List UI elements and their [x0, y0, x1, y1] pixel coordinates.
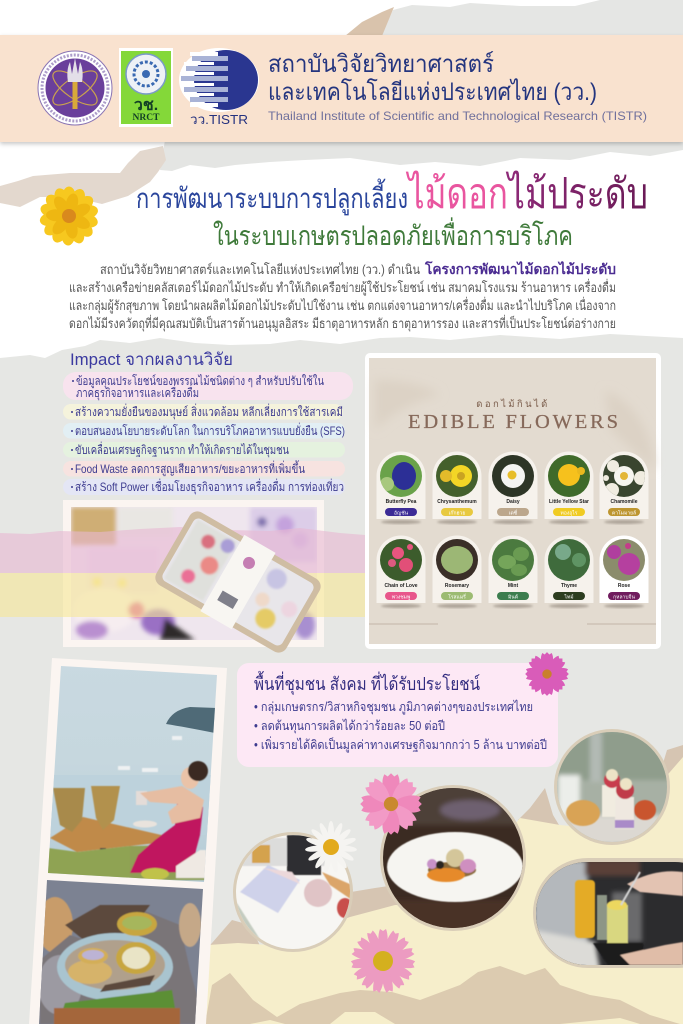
logo: TISTR emblem round purple — [38, 51, 112, 125]
box label — [200, 535, 276, 629]
card: chrysanthemum: Chrysanthemum — [437, 499, 477, 505]
card: mint: มินต์ — [508, 593, 518, 600]
impact item 5: Food Waste ลดการสูญเสียอาหาร/ขยะอาหารที่เพิ่มขึ้น — [75, 460, 305, 477]
card: little yellow star: Little Yellow Star — [549, 499, 589, 505]
community item 2: • ลดต้นทุนการผลิตได้กว่าร้อยละ 50 ต่อปี — [254, 719, 445, 734]
card: chain of love — [376, 536, 426, 608]
impact item 4: ขับเคลื่อนเศรษฐกิจฐานราก ทำให้เกิดรายได้ในชุมชน — [75, 441, 289, 458]
photo circle: tea product table — [233, 832, 355, 955]
panel: impact — [63, 350, 353, 495]
card: chain of love: พวงชมพู — [392, 594, 410, 600]
community item 1: • กลุ่มเกษตรกร/วิสาหกิจชุมชน ภูมิภาคต่างๆของประเทศไทย — [254, 700, 533, 715]
background: pink and yellow bands — [0, 527, 365, 617]
main title: ไม้ดอก — [406, 170, 508, 217]
header title text — [268, 50, 647, 123]
icon: pink cosmos — [360, 773, 422, 835]
intro paragraph — [69, 260, 616, 332]
card: chamomile: Chamomile — [611, 499, 638, 505]
card: chamomile: คาโมมายล์ — [612, 509, 636, 516]
intro paragraph: โครงการพัฒนาไม้ดอกไม้ประดับ — [424, 260, 616, 277]
panel: edible flowers — [365, 353, 661, 649]
icon: yellow flower — [39, 186, 99, 246]
card: daisy: Daisy — [506, 499, 520, 505]
card: butterfly pea: Butterfly Pea — [386, 499, 417, 505]
impact item 1: ข้อมูลคุณประโยชน์ของพรรณไม้ชนิดต่าง ๆ สำหรับปรับใช้ใน — [76, 374, 324, 389]
icon: magenta cosmos — [525, 652, 569, 696]
background: grey torn top right — [380, 0, 683, 40]
main title: ไม้ประดับ — [506, 170, 648, 217]
impact item 1: ภาคธุรกิจอาหารและเครื่องดื่ม — [76, 384, 199, 401]
card: thyme: ไทม์ — [563, 593, 574, 600]
background: beige hills bottom — [205, 966, 680, 1024]
header band — [0, 35, 683, 142]
logo: NRCT green square — [119, 48, 173, 127]
background: beige torn strip title — [0, 146, 166, 207]
main title: ในระบบเกษตรปลอดภัยเพื่อการบริโภค — [213, 217, 573, 251]
card: chain of love: Chain of Love — [384, 583, 418, 589]
photo: plated dessert — [36, 875, 208, 1024]
heading: edible flowers thai: ดอกไม้กินได้ — [476, 398, 550, 410]
card: daisy — [488, 452, 538, 524]
heading: edible flowers: EDIBLE FLOWERS — [408, 411, 618, 433]
impact item 3 — [63, 422, 345, 438]
community item 3: • เพิ่มรายได้คิดเป็นมูลค่าทางเศรษฐกิจมากกว่า 5 ล้าน บาทต่อปี — [254, 736, 547, 753]
logo: NRCT green square: วช. — [134, 97, 158, 114]
logo: NRCT green square: NRCT — [133, 113, 160, 123]
card: mint — [488, 536, 538, 608]
header title text: และเทคโนโลยีแห่งประเทศไทย (วว.) — [268, 78, 597, 106]
card: thyme: Thyme — [561, 583, 577, 589]
background: grey lower page — [0, 334, 683, 1024]
card: rosemary — [432, 536, 482, 608]
card: little yellow star: ทองอุไร — [561, 509, 578, 516]
icon: pink daisy — [351, 929, 415, 993]
panel: community benefits — [237, 663, 558, 767]
photo capsule: bartender drink — [533, 858, 683, 970]
photo: edible flowers box background — [63, 500, 324, 647]
icon: white daisy — [305, 821, 357, 873]
impact item 2: สร้างความยั่งยืนของมนุษย์ สิ่งแวดล้อม หลีกเลี่ยงการใช้สารเคมี — [75, 403, 343, 420]
impact item 6 — [63, 478, 345, 495]
card: chamomile — [600, 452, 648, 524]
logo: TISTR round blue: วว.TISTR — [190, 112, 248, 127]
header title text: สถาบันวิจัยวิทยาศาสตร์ — [268, 50, 494, 78]
impact item 1 — [63, 372, 353, 401]
photo circle: parfait desserts — [554, 729, 670, 845]
card: butterfly pea — [376, 452, 426, 524]
main title — [136, 170, 648, 251]
intro paragraph: สถาบันวิจัยวิทยาศาสตร์และเทคโนโลยีแห่งประเทศไทย (วว.) ดำเนิน — [100, 262, 420, 277]
photo strip: polaroid frame — [29, 658, 227, 1024]
card: rosemary: โรสแมรี่ — [448, 593, 466, 600]
photo: packaged flowers box — [151, 506, 325, 658]
background: beige torn patches bottom — [205, 745, 683, 950]
impact item 3: ตอบสนองนโยบายระดับโลก ในการบริโภคอาหารแบบยั่งยืน (SFS) — [75, 422, 345, 438]
card: chrysanthemum: เก๊กฮวย — [449, 509, 465, 516]
photo: woman at sea terrace — [48, 666, 217, 882]
card: rose: Rose — [618, 583, 630, 589]
heading: impact: Impact จากผลงานวิจัย — [70, 350, 233, 369]
main title: การพัฒนาระบบการปลูกเลี้ยง — [136, 178, 408, 216]
impact item 2 — [63, 403, 343, 420]
photo circle: plated dish — [380, 785, 526, 935]
logo: TISTR round blue — [179, 48, 259, 127]
background: grey behind title — [160, 140, 683, 171]
card: little yellow star — [544, 452, 594, 524]
heading: community benefits: พื้นที่ชุมชน สังคม ที่ได้รับประโยชน์ — [254, 671, 480, 695]
card: mint: Mint — [508, 583, 518, 589]
impact item 6: สร้าง Soft Power เชื่อมโยงธุรกิจอาหาร เครื่องดื่ม การท่องเที่ยว — [75, 478, 344, 495]
background: cream ground — [205, 757, 683, 1024]
card: butterfly pea: อัญชัน — [394, 510, 409, 516]
card: rosemary: Rosemary — [445, 583, 469, 589]
card: rose — [600, 536, 648, 608]
card: thyme — [544, 536, 594, 608]
background: beige torn strip top — [345, 7, 394, 36]
card: rose: กุหลาบจีน — [613, 593, 635, 600]
card: chrysanthemum — [432, 452, 482, 524]
card: daisy: เดซี่ — [509, 509, 518, 516]
header title text: Thailand Institute of Scientific and Technological Research (TISTR) — [268, 109, 647, 123]
